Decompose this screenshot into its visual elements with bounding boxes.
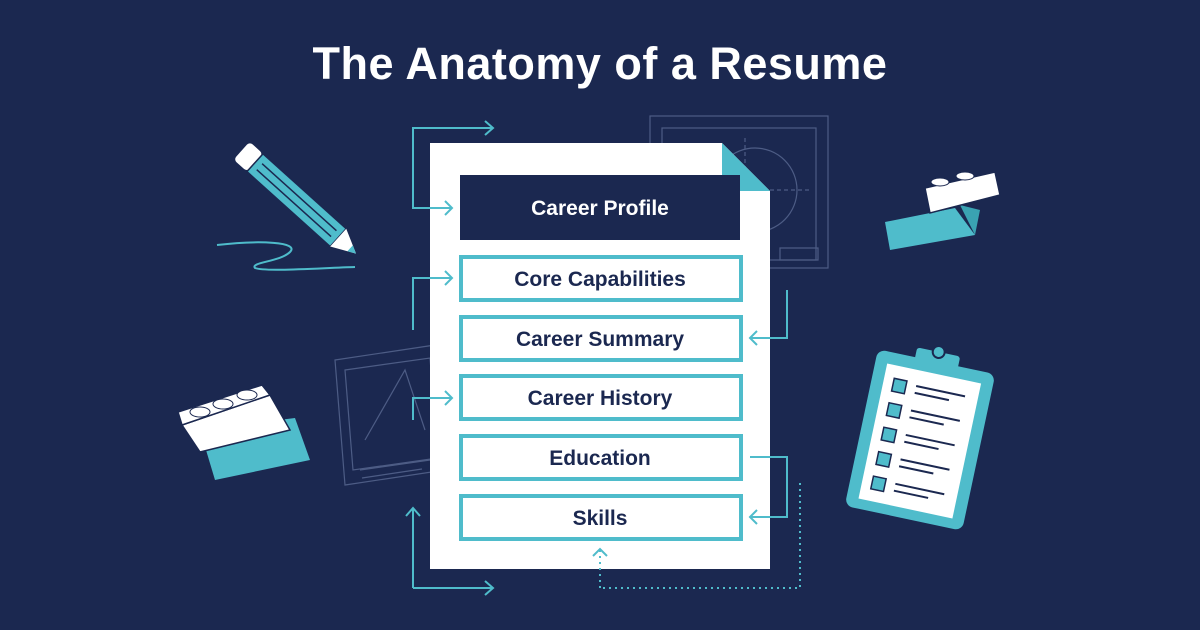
section: Career Summary: Career Summary — [516, 328, 684, 351]
title: The Anatomy of a Resume — [313, 38, 887, 89]
section: Core Capabilities: Core Capabilities — [514, 268, 686, 291]
section: Career Profile: Career Profile — [531, 197, 669, 220]
section: Career Profile — [460, 175, 740, 240]
icon: lego bricks right — [885, 172, 1000, 250]
section: Career Summary — [461, 317, 741, 360]
icon: pencil — [234, 142, 364, 263]
blueprint sketch left — [335, 345, 445, 485]
section: Career History — [461, 376, 741, 419]
icon: pencil squiggle — [217, 242, 355, 270]
resume paper — [430, 143, 770, 569]
section: Education — [461, 436, 741, 479]
icon: clipboard — [845, 334, 999, 531]
arrows — [406, 121, 800, 595]
icon: lego bricks left — [178, 385, 310, 480]
section: Skills: Skills — [573, 507, 627, 530]
section: Skills — [461, 496, 741, 539]
section: Core Capabilities — [461, 257, 741, 300]
section: Career History: Career History — [528, 387, 673, 410]
section: Education: Education — [549, 447, 651, 470]
blueprint sketch top right — [650, 116, 828, 268]
fold corner — [722, 143, 770, 191]
